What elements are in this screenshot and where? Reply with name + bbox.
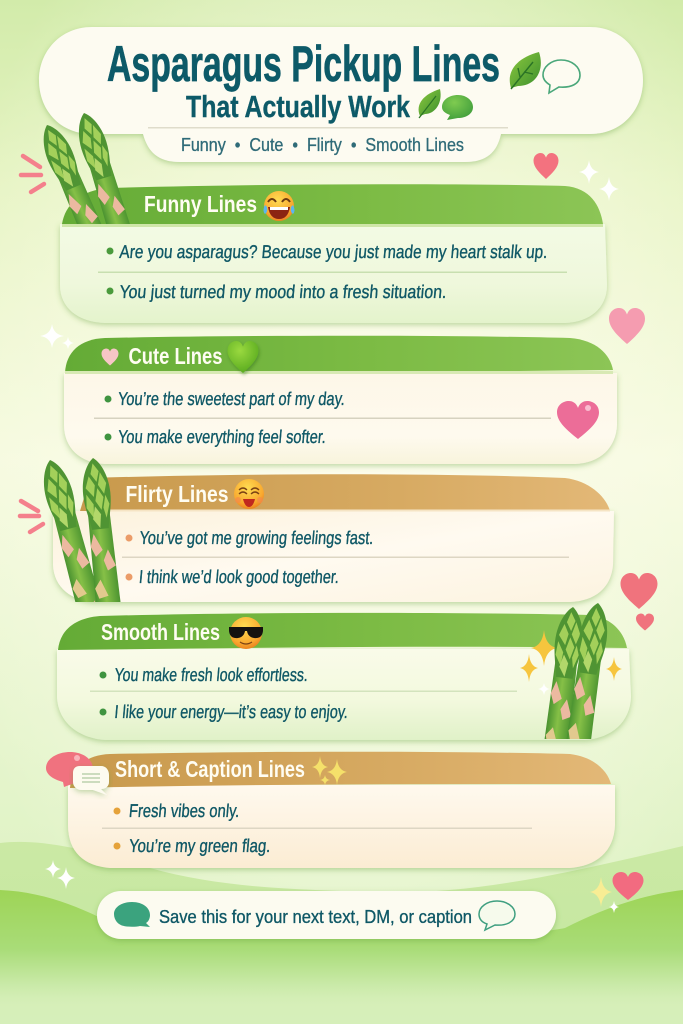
panel header xyxy=(65,336,613,373)
panel header xyxy=(80,474,610,511)
line 1: You make fresh look effortless. xyxy=(114,664,309,685)
panel body xyxy=(60,224,607,323)
line 1: You’re the sweetest part of my day. xyxy=(117,388,346,409)
footer pill xyxy=(97,891,556,939)
icon: yellow sparkles xyxy=(312,756,347,785)
icon: laughing emoji xyxy=(264,191,294,221)
icon: gold sparkles xyxy=(520,630,622,695)
icon: chat bubbles xyxy=(46,752,109,795)
heading: Flirty Lines xyxy=(126,481,228,507)
line 1: You’ve got me growing feelings fast. xyxy=(139,527,374,548)
line 2: I think we’d look good together. xyxy=(138,566,340,587)
accent: pink burst top xyxy=(21,156,44,192)
panel header xyxy=(58,613,627,650)
decorative sparkles xyxy=(40,160,619,913)
panel body xyxy=(57,649,631,740)
footer text: Save this for your next text, DM, or caption xyxy=(159,906,472,927)
panel: short and caption lines xyxy=(46,752,615,868)
panel body xyxy=(68,785,615,868)
subtitle: Funny • Cute • Flirty • Smooth Lines xyxy=(181,134,464,155)
footer callout xyxy=(97,891,556,939)
heading: Smooth Lines xyxy=(101,619,220,645)
icon: small leaf xyxy=(419,89,441,118)
panel body xyxy=(53,511,614,602)
front hills xyxy=(0,890,683,1024)
icon: outline speech bubble xyxy=(479,901,515,930)
panel: funny lines xyxy=(60,184,607,323)
banner shape xyxy=(39,27,643,162)
icon: leaf xyxy=(510,52,541,89)
back hills xyxy=(0,842,683,1024)
accent: pink burst middle xyxy=(20,501,43,532)
heading: Funny Lines xyxy=(144,191,257,217)
panel: cute lines xyxy=(64,336,617,464)
icon: small pink heart xyxy=(102,348,118,366)
panel header xyxy=(70,752,611,788)
icon: smiling emoji xyxy=(234,479,264,509)
line 2: You make everything feel softer. xyxy=(117,426,327,447)
line 1: Fresh vibes only. xyxy=(128,800,240,821)
title banner xyxy=(39,27,643,162)
line 2: You just turned my mood into a fresh situation. xyxy=(119,281,447,302)
panel body xyxy=(64,373,617,464)
asparagus pair: top left xyxy=(44,113,130,224)
line 2: I like your energy—it’s easy to enjoy. xyxy=(114,701,349,722)
heading: Short & Caption Lines xyxy=(115,756,305,782)
title line 1: Asparagus Pickup Lines xyxy=(107,36,500,92)
heading: Cute Lines xyxy=(128,343,222,369)
icon: sunglasses emoji xyxy=(229,617,263,649)
panel: flirty lines xyxy=(53,474,614,602)
icon: green speech bubble xyxy=(442,95,473,120)
icon: outline speech bubble xyxy=(543,60,580,93)
panel header xyxy=(62,184,603,224)
title line 2: That Actually Work xyxy=(186,89,411,124)
asparagus pair: smooth panel xyxy=(544,603,608,739)
icon: green heart xyxy=(228,341,258,373)
line 1: Are you asparagus? Because you just made my heart stalk up. xyxy=(119,241,548,262)
decorative hearts xyxy=(534,153,658,900)
icon: teal speech bubble xyxy=(114,902,150,927)
asparagus pair: flirty panel xyxy=(44,458,120,602)
panel: smooth lines xyxy=(57,613,631,740)
line 2: You’re my green flag. xyxy=(128,835,271,856)
icon: big pink heart xyxy=(557,401,599,439)
